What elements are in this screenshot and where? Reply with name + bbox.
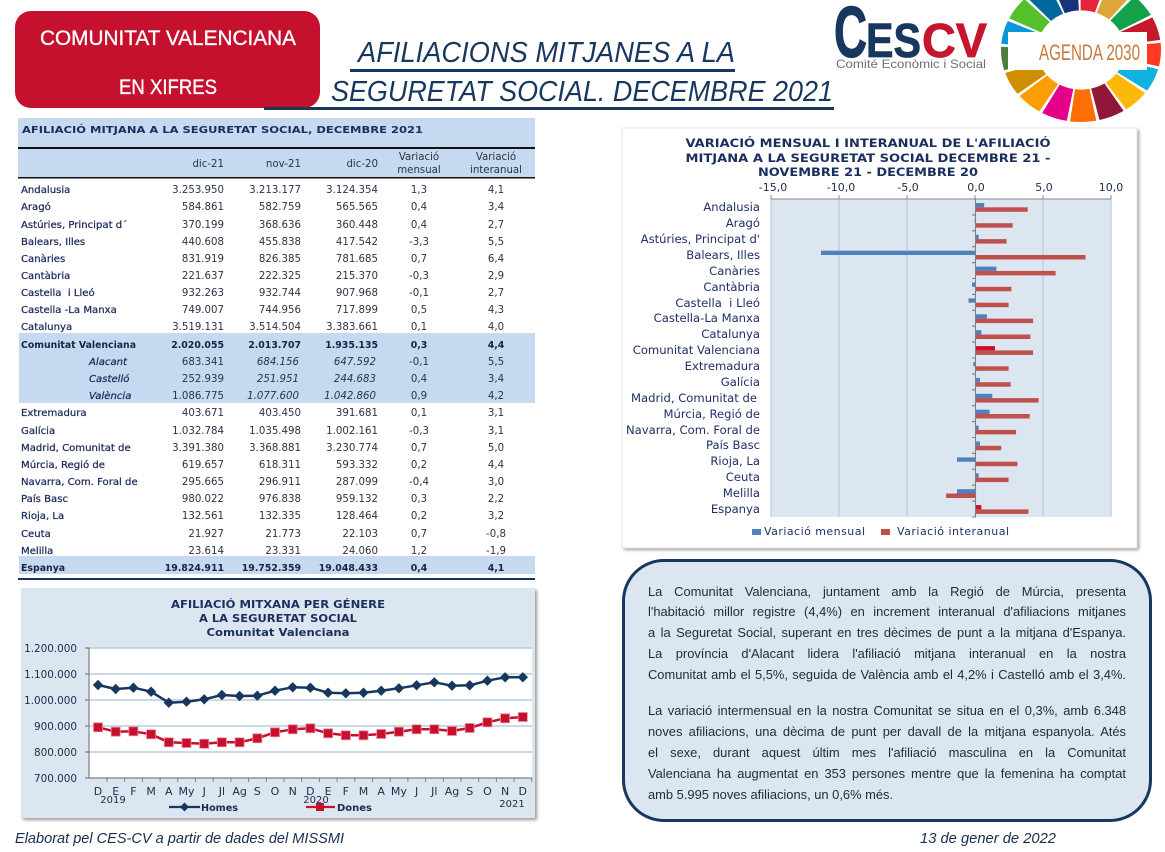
bar chart category labels: Catalunya xyxy=(701,327,760,341)
row: Catalunya: 3.514.504 xyxy=(249,322,301,333)
row: Alacant: 684.156 xyxy=(257,357,300,368)
row: València xyxy=(89,390,504,402)
row: País Basc: 0,3 xyxy=(411,494,427,505)
badge: Comunitat Valenciana en xifres: EN XIFRES xyxy=(119,76,217,99)
row: Melilla: 23.331 xyxy=(265,546,301,557)
row: Canàries xyxy=(21,253,504,265)
logo: Agenda 2030 wheel xyxy=(993,0,1165,129)
row: Galícia: Galícia xyxy=(21,425,55,437)
callout: commentary text: La Comunitat Valenciana, juntament amb la Regió de Múrcia, presenta xyxy=(648,584,1126,599)
x axis month labels: S xyxy=(466,785,473,798)
line chart title: A LA SEGURETAT SOCIAL xyxy=(199,612,357,625)
line chart title xyxy=(171,598,385,639)
row: Espanya: 4,1 xyxy=(488,563,504,574)
x axis month labels: Ag xyxy=(232,785,247,798)
row: Castella-La Manxa: 749.007 xyxy=(182,305,224,316)
row: Comunitat Valenciana: Comunitat Valenciana xyxy=(21,340,136,351)
row: València: 4,2 xyxy=(488,391,504,402)
x axis month labels: E xyxy=(325,785,332,798)
row: Espanya: Espanya xyxy=(21,563,65,574)
row: Ceuta: 22.103 xyxy=(342,529,378,540)
row: Alacant: 5,5 xyxy=(488,357,504,368)
row: València: 0,9 xyxy=(411,391,427,402)
row: Espanya: 0,4 xyxy=(411,563,428,574)
row: Extremadura: 3,1 xyxy=(488,408,504,419)
row: Melilla: 1,2 xyxy=(411,546,427,557)
logo: CES-CV: Comité Econòmic i Social xyxy=(836,57,986,71)
bar chart category labels: Extremadura xyxy=(685,359,760,373)
x axis month labels: My xyxy=(391,785,407,798)
row: Galícia: 3,1 xyxy=(488,426,504,437)
bar chart category labels: Madrid, Comunitat de xyxy=(631,391,757,405)
row: Catalunya: 0,1 xyxy=(411,322,427,333)
bar chart category labels: Ceuta xyxy=(726,470,760,484)
x axis month labels: O xyxy=(483,785,492,798)
table column headers: mensual xyxy=(397,165,441,176)
row: Castelló: 244.683 xyxy=(334,374,376,385)
bar chart category labels: Castella i Lleó xyxy=(675,296,760,310)
logo: CES-CV xyxy=(834,0,987,73)
row: Extremadura: 403.671 xyxy=(182,408,224,419)
row: Alacant: Alacant xyxy=(88,357,128,368)
table column headers: Variació xyxy=(399,151,439,163)
row: Comunitat Valenciana: 2.020.055 xyxy=(171,340,224,351)
y axis labels: 1.000.000 xyxy=(24,695,77,707)
row: Castella i Lleó: 907.968 xyxy=(336,288,378,299)
row: Castella-La Manxa: 717.899 xyxy=(336,305,378,316)
callout: commentary text: Valenciana ha augmentat en 353 persones mentre que la femenina ha comptat xyxy=(648,766,1126,781)
row: Múrcia: Múrcia, Regió de xyxy=(21,459,105,471)
bar chart legend xyxy=(752,525,1009,538)
row: Astúries: 368.636 xyxy=(259,220,301,231)
row: Castelló: 0,4 xyxy=(411,374,427,385)
bar chart title: NOVEMBRE 21 - DECEMBRE 20 xyxy=(758,166,978,179)
row: Astúries: 360.448 xyxy=(336,220,378,231)
row: Madrid: 3.391.380 xyxy=(172,443,224,454)
panel: line chart by gender xyxy=(21,588,537,820)
row: Rioja: 132.335 xyxy=(259,511,301,522)
logo: CES-CV: ES xyxy=(866,15,921,68)
row: Alacant: 647.592 xyxy=(334,357,376,368)
bar chart category labels: Rioja, La xyxy=(710,454,760,468)
row: Castelló: 3,4 xyxy=(488,374,504,385)
row: Múrcia xyxy=(21,459,504,471)
bar chart category labels: País Basc xyxy=(706,438,760,452)
row: Catalunya: 3.383.661 xyxy=(326,322,378,333)
bar chart category labels: Aragó xyxy=(726,216,760,230)
row: Extremadura: 0,1 xyxy=(411,408,427,419)
row: Castella i Lleó: 2,7 xyxy=(488,288,504,299)
row: Comunitat Valenciana: 1.935.135 xyxy=(325,340,378,351)
row: Melilla xyxy=(21,546,506,557)
row: Alacant xyxy=(88,357,504,368)
row: País Basc: 959.132 xyxy=(336,494,378,505)
row: Andalusia: Andalusia xyxy=(21,185,70,196)
table heading: AFILIACIÓ MITJANA A LA SEGURETAT SOCIAL, DECEMBRE 2021 xyxy=(22,123,423,136)
row: Navarra: 296.911 xyxy=(259,477,301,488)
y axis labels: 1.200.000 xyxy=(24,643,77,655)
badge: Comunitat Valenciana en xifres xyxy=(15,11,320,108)
bar chart x axis labels: -5,0 xyxy=(897,181,919,194)
row: Canàries: 6,4 xyxy=(488,254,504,265)
table column headers: Variació xyxy=(476,151,516,163)
row: Astúries xyxy=(21,219,504,231)
callout: commentary text: a la Seguretat Social, superant en tres dècimes de punt a la mitjana d'Espanya. xyxy=(648,625,1126,640)
x axis month labels: D xyxy=(519,785,527,798)
row: Aragó: 584.861 xyxy=(182,202,224,213)
row: Ceuta: Ceuta xyxy=(21,529,51,540)
row: Cantàbria: 215.370 xyxy=(336,271,378,282)
footer: date: 13 de gener de 2022 xyxy=(920,830,1057,847)
x axis month labels: A xyxy=(165,785,173,798)
row: Aragó: 0,4 xyxy=(411,202,427,213)
row: Aragó xyxy=(21,201,504,213)
row: Navarra: 3,0 xyxy=(488,477,504,488)
legend: Dones xyxy=(306,803,372,814)
x axis month labels: N xyxy=(289,785,297,798)
row: Catalunya: 4,0 xyxy=(488,322,504,333)
x axis month labels: M xyxy=(359,785,368,798)
y axis labels xyxy=(24,643,77,785)
y axis labels: 800.000 xyxy=(34,747,77,759)
row: Galícia: 1.002.161 xyxy=(326,426,378,437)
row: Rioja: 128.464 xyxy=(336,511,378,522)
legend: Dones: Dones xyxy=(337,803,372,814)
table column headers: nov-21 xyxy=(266,159,301,170)
row: València: 1.077.600 xyxy=(247,391,299,402)
x axis month labels: D xyxy=(306,785,315,798)
bar chart category labels: Navarra, Com. Foral de xyxy=(626,423,760,437)
bar chart category labels: Astúries, Principat d' xyxy=(641,232,760,246)
table column headers: dic-21 xyxy=(192,159,224,170)
row: Cantàbria: -0,3 xyxy=(409,271,429,282)
x axis month labels: D xyxy=(94,785,102,798)
bar chart x axis labels: -15,0 xyxy=(759,181,787,194)
bar chart category labels: Múrcia, Regió de xyxy=(664,407,760,421)
table column headers: dic-20 xyxy=(346,159,378,170)
row: Múrcia: 593.332 xyxy=(336,460,378,471)
row: Ceuta: 21.773 xyxy=(265,529,301,540)
x axis month labels: My xyxy=(178,785,195,798)
bar chart title: VARIACIÓ MENSUAL I INTERANUAL DE L'AFILIACIÓ xyxy=(686,137,1051,150)
bar chart category labels: Andalusia xyxy=(703,200,760,214)
row: Castella-La Manxa: Castella -La Manxa xyxy=(21,305,117,316)
row: Rioja xyxy=(21,511,504,522)
row: Navarra: 295.665 xyxy=(182,477,224,488)
bar chart title xyxy=(686,137,1051,179)
legend: Homes: Homes xyxy=(201,803,238,814)
bar chart category labels: Comunitat Valenciana xyxy=(633,343,760,357)
row: País Basc: 976.838 xyxy=(259,494,301,505)
x axis month labels: J xyxy=(414,785,418,798)
callout: commentary text xyxy=(622,559,1152,822)
bar chart x axis labels: 10,0 xyxy=(1099,181,1123,194)
year labels xyxy=(100,795,525,810)
panel: data table xyxy=(18,118,535,580)
bar chart x axis labels: 0,0 xyxy=(967,181,985,194)
row: Castella i Lleó: -0,1 xyxy=(409,288,429,299)
y axis labels: 1.100.000 xyxy=(24,669,77,681)
row: Madrid xyxy=(21,443,504,454)
row: Castella-La Manxa xyxy=(21,305,504,316)
row: Espanya: 19.048.433 xyxy=(319,563,378,574)
row: Extremadura: Extremadura xyxy=(21,408,87,419)
row: Extremadura: 391.681 xyxy=(336,408,378,419)
row: Balears xyxy=(21,237,504,248)
row: Canàries: 831.919 xyxy=(182,254,224,265)
row: Navarra: 287.099 xyxy=(336,477,378,488)
row: Múrcia: 618.311 xyxy=(259,460,301,471)
row: Andalusia: 3.213.177 xyxy=(249,185,301,196)
row: Alacant: -0,1 xyxy=(409,357,429,368)
row: Andalusia: 1,3 xyxy=(411,185,427,196)
footer: source note: Elaborat pel CES-CV a partir de dades del MISSMI xyxy=(15,830,344,847)
row: Navarra xyxy=(21,477,504,488)
line: Homes xyxy=(98,677,523,703)
x axis month labels: A xyxy=(377,785,385,798)
row: Balears: 455.838 xyxy=(259,237,301,248)
row: Castella i Lleó: 932.263 xyxy=(182,288,224,299)
row: Castelló: 251.951 xyxy=(257,374,299,385)
row: Espanya xyxy=(21,563,504,574)
row: Cantàbria xyxy=(21,270,504,282)
row: Galícia: -0,3 xyxy=(409,426,429,437)
row: Castella i Lleó: 932.744 xyxy=(259,288,301,299)
legend: Homes xyxy=(169,802,238,814)
row: Extremadura: 403.450 xyxy=(259,408,301,419)
x axis month labels: N xyxy=(501,785,509,798)
y axis labels: 700.000 xyxy=(34,773,77,785)
x axis month labels: Ag xyxy=(445,785,459,798)
row: Castelló: Castelló xyxy=(89,373,129,385)
row: Rioja: 3,2 xyxy=(488,511,504,522)
bar chart category labels: Cantàbria xyxy=(703,280,760,294)
row: Comunitat Valenciana xyxy=(21,340,505,351)
row: Castelló: 252.939 xyxy=(182,374,224,385)
bar chart category labels: Espanya xyxy=(711,502,760,516)
row: València: València xyxy=(89,390,131,402)
row: Astúries: 370.199 xyxy=(182,220,224,231)
bar chart x axis labels: 5,0 xyxy=(1035,181,1053,194)
row: Ceuta: 0,7 xyxy=(411,529,427,540)
x axis month labels: J xyxy=(202,785,206,798)
row: Aragó: 3,4 xyxy=(488,202,504,213)
row: Madrid: 3.368.881 xyxy=(249,443,301,454)
bar chart category labels: Balears, Illes xyxy=(686,248,760,262)
row: Catalunya: Catalunya xyxy=(21,322,72,333)
year labels: 2019 xyxy=(100,795,126,806)
year labels: 2021 xyxy=(499,799,525,810)
table column headers xyxy=(192,151,522,176)
bar chart x axis labels: -10,0 xyxy=(827,181,855,194)
row: Balears: 5,5 xyxy=(488,237,504,248)
row: Madrid: 3.230.774 xyxy=(326,443,378,454)
callout: commentary text: l'habitació millor registre (4,4%) en increment interanual d'afiliacions mitjanes xyxy=(648,604,1126,619)
row: Canàries: 0,7 xyxy=(411,254,427,265)
row: Castelló xyxy=(89,373,504,385)
row: Andalusia: 4,1 xyxy=(488,185,504,196)
row: Castella-La Manxa: 4,3 xyxy=(488,305,504,316)
row: Galícia xyxy=(21,425,504,437)
bar chart category labels: Melilla xyxy=(723,486,760,500)
x axis month labels: O xyxy=(271,785,280,798)
row: País Basc: 2,2 xyxy=(488,494,504,505)
row: Extremadura xyxy=(21,408,504,419)
x axis month labels: Jl xyxy=(430,785,437,798)
row: Melilla: -1,9 xyxy=(486,546,506,557)
row: Castella-La Manxa: 0,5 xyxy=(411,305,427,316)
bars: annual variation xyxy=(946,207,1086,514)
row: Galícia: 1.035.498 xyxy=(249,426,301,437)
row: Canàries: Canàries xyxy=(21,253,65,265)
callout: commentary text: La província d'Alacant lidera l'afiliació mitjana interanual en la nostra xyxy=(648,646,1126,661)
row: Canàries: 826.385 xyxy=(259,254,301,265)
year labels: 2020 xyxy=(303,795,329,806)
bar chart x axis labels xyxy=(759,181,1123,194)
row: Madrid: Madrid, Comunitat de xyxy=(21,443,131,454)
row: Rioja: 0,2 xyxy=(411,511,427,522)
row: Astúries: 2,7 xyxy=(488,220,504,231)
row: Cantàbria: 2,9 xyxy=(488,271,504,282)
bar chart legend: Variació mensual xyxy=(764,525,865,538)
row: Múrcia: 619.657 xyxy=(182,460,224,471)
row: Melilla: Melilla xyxy=(21,546,53,557)
row: Navarra: Navarra, Com. Foral de xyxy=(21,477,138,488)
bar chart legend: Variació interanual xyxy=(897,525,1009,538)
bar chart category labels xyxy=(626,200,760,516)
row: Espanya: 19.752.359 xyxy=(242,563,301,574)
line chart title: Comunitat Valenciana xyxy=(206,626,350,639)
row: Melilla: 24.060 xyxy=(342,546,378,557)
row: Balears: -3,3 xyxy=(409,237,429,248)
line chart title: AFILIACIÓ MITXANA PER GÉNERE xyxy=(171,598,385,611)
row: Melilla: 23.614 xyxy=(188,546,224,557)
title xyxy=(264,37,834,110)
row: Balears: 440.608 xyxy=(182,237,224,248)
x axis month labels: E xyxy=(112,785,119,798)
row: Madrid: 5,0 xyxy=(488,443,504,454)
row: Ceuta: -0,8 xyxy=(486,529,506,540)
y axis labels: 900.000 xyxy=(34,721,77,733)
callout: commentary text: amb 5.995 noves afiliacions, un 0,6% més. xyxy=(648,787,893,802)
row: Ceuta: 21.927 xyxy=(188,529,224,540)
row: València: 1.086.775 xyxy=(172,391,224,402)
row: País Basc xyxy=(21,493,504,505)
x axis month labels: Jl xyxy=(218,785,225,798)
row: Catalunya: 3.519.131 xyxy=(172,322,224,333)
bars: monthly variation xyxy=(821,203,996,509)
row: Galícia: 1.032.784 xyxy=(172,426,224,437)
row: Cantàbria: 221.637 xyxy=(182,271,224,282)
title: AFILIACIONS MITJANES A LA xyxy=(356,37,735,69)
title: SEGURETAT SOCIAL. DECEMBRE 2021 xyxy=(331,76,833,108)
row: Múrcia: 0,2 xyxy=(411,460,427,471)
row: Rioja: Rioja, La xyxy=(21,511,64,522)
row: Cantàbria: 222.325 xyxy=(259,271,301,282)
row: Espanya: 19.824.911 xyxy=(165,563,224,574)
row: Balears: 417.542 xyxy=(336,237,378,248)
callout: commentary text: Comunitat amb el 5,5%, seguida de València amb el 4,2% i Castelló amb el 3,4%. xyxy=(648,667,1126,682)
x axis month labels: S xyxy=(254,785,261,798)
bar chart title: MITJANA A LA SEGURETAT SOCIAL DECEMBRE 21 - xyxy=(686,152,1051,165)
row: Andalusia: 3.253.950 xyxy=(172,185,224,196)
row: Andalusia: 3.124.354 xyxy=(326,185,378,196)
row: Castella-La Manxa: 744.956 xyxy=(259,305,301,316)
row: País Basc: País Basc xyxy=(21,493,68,505)
line: Dones xyxy=(98,717,523,744)
row: Comunitat Valenciana: 0,3 xyxy=(411,340,427,351)
row: Castella i Lleó: Castella i Lleó xyxy=(21,287,95,299)
row: Múrcia: 4,4 xyxy=(488,460,504,471)
row: Rioja: 132.561 xyxy=(182,511,224,522)
row: Aragó: 565.565 xyxy=(336,202,378,213)
logo: CES-CV: CV xyxy=(922,15,987,68)
row: Balears: Balears, Illes xyxy=(21,237,85,248)
row: Comunitat Valenciana: 2.013.707 xyxy=(248,340,301,351)
row: Cantàbria: Cantàbria xyxy=(21,270,70,282)
row: Catalunya xyxy=(21,322,504,333)
row: Astúries: Astúries, Principat d´ xyxy=(21,219,127,231)
row: Aragó: 582.759 xyxy=(259,202,301,213)
panel: bar chart of monthly and annual variation xyxy=(622,128,1139,550)
row: Comunitat Valenciana: 4,4 xyxy=(488,340,505,351)
x axis month labels xyxy=(94,785,527,798)
x axis month labels: F xyxy=(130,785,137,798)
row: País Basc: 980.022 xyxy=(182,494,224,505)
row: Castella i Lleó xyxy=(21,287,504,299)
callout: commentary text: el sexe, durant aquest últim mes l'afiliació masculina en la Comunitat xyxy=(648,745,1126,760)
table column headers: interanual xyxy=(470,165,522,176)
row: Ceuta xyxy=(21,529,506,540)
bar chart category labels: Castella-La Manxa xyxy=(654,311,760,325)
callout: commentary text: noves afiliacions, una dècima de punt per davall de la mitjana espanyola. Atés xyxy=(648,724,1126,739)
bar chart category labels: Canàries xyxy=(709,264,760,278)
row: Alacant: 683.341 xyxy=(182,357,224,368)
x axis month labels: M xyxy=(146,785,156,798)
row: Navarra: -0,4 xyxy=(409,477,429,488)
badge: Comunitat Valenciana en xifres: COMUNITAT VALENCIANA xyxy=(40,27,296,50)
row: Astúries: 0,4 xyxy=(411,220,427,231)
row: Aragó: Aragó xyxy=(21,201,51,213)
callout: commentary text: La variació intermensual en la nostra Comunitat se situa en el 0,3%, amb 6.348 xyxy=(648,703,1126,718)
row: Andalusia xyxy=(21,185,504,196)
row: Canàries: 781.685 xyxy=(336,254,378,265)
x axis month labels: F xyxy=(343,785,349,798)
row: València: 1.042.860 xyxy=(324,391,376,402)
bar chart category labels: Galícia xyxy=(721,375,760,389)
row: Madrid: 0,7 xyxy=(411,443,427,454)
